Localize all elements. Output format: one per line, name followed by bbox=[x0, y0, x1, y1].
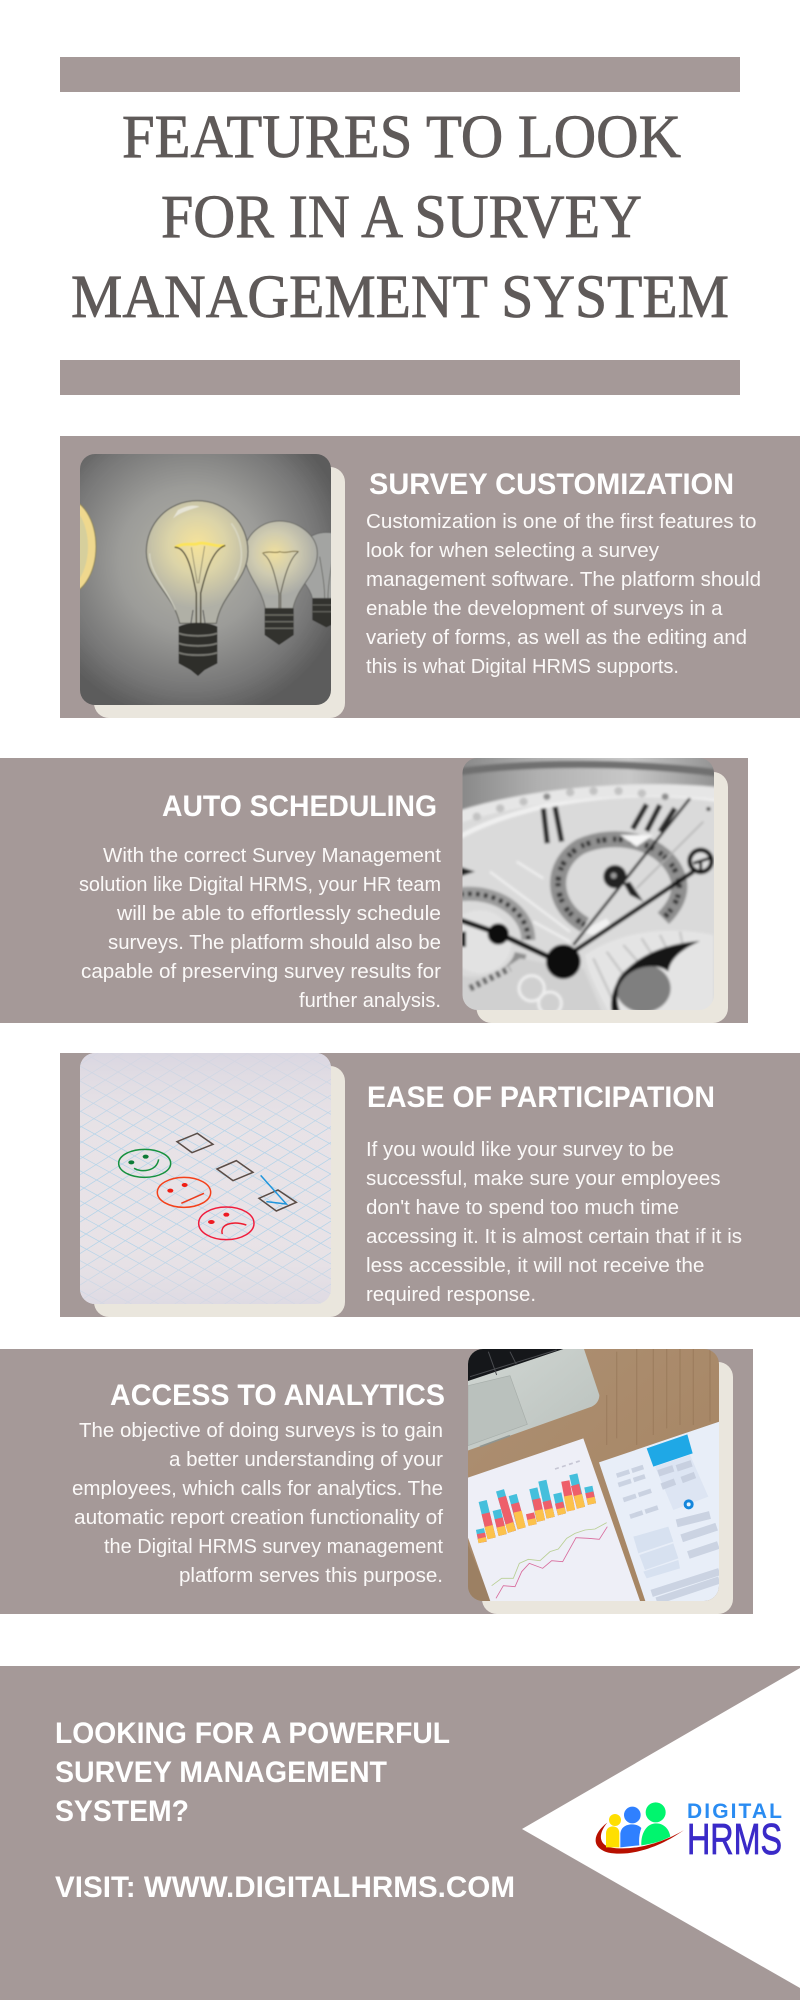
body text: Customization is one of the first features to bbox=[366, 511, 756, 533]
body text: The objective of doing surveys is to gain bbox=[79, 1420, 443, 1442]
body text: variety of forms, as well as the editing and bbox=[366, 627, 747, 649]
body text: the Digital HRMS survey management bbox=[104, 1536, 443, 1558]
title bbox=[71, 104, 729, 331]
logo: Digital HRMS bbox=[596, 1800, 782, 1864]
panel: survey customization bbox=[31, 436, 800, 718]
body text: required response. bbox=[366, 1284, 536, 1306]
heading: SURVEY CUSTOMIZATION bbox=[369, 468, 734, 501]
body text: don't have to spend too much time bbox=[366, 1197, 679, 1219]
call to action text: SYSTEM? bbox=[55, 1795, 189, 1828]
logo wordmark bbox=[687, 1800, 782, 1864]
image: light bulbs bbox=[80, 454, 331, 705]
body text: look for when selecting a survey bbox=[366, 540, 659, 562]
title: MANAGEMENT SYSTEM bbox=[71, 264, 729, 331]
body text: a better understanding of your bbox=[169, 1449, 443, 1471]
body text: accessing it. It is almost certain that if it is bbox=[366, 1226, 742, 1248]
icon: people with swoosh bbox=[596, 1802, 684, 1854]
body text: With the correct Survey Management bbox=[103, 845, 441, 867]
body text: capable of preserving survey results for bbox=[81, 961, 441, 983]
panel: footer call to action bbox=[0, 1666, 800, 2000]
panel: auto scheduling bbox=[0, 755, 748, 1023]
panel background bbox=[0, 1349, 753, 1614]
logo wordmark: DIGITAL bbox=[687, 1800, 782, 1823]
panel: access to analytics bbox=[0, 1345, 753, 1614]
title: FEATURES TO LOOK bbox=[122, 104, 681, 171]
image backing card bbox=[94, 467, 345, 718]
image: smiley checklist bbox=[80, 1053, 331, 1304]
body text: will be able to effortlessly schedule bbox=[116, 903, 441, 925]
body text: automatic report creation functionality of bbox=[74, 1507, 443, 1529]
footer background bbox=[0, 1666, 800, 2000]
report text lines bbox=[617, 1463, 719, 1601]
call to action text: SURVEY MANAGEMENT bbox=[55, 1756, 387, 1789]
image backing card bbox=[482, 1362, 733, 1614]
body text: enable the development of surveys in a bbox=[366, 598, 723, 620]
bar chart bbox=[480, 1474, 592, 1542]
body text bbox=[366, 1139, 742, 1306]
body text: further analysis. bbox=[299, 990, 441, 1012]
image backing card bbox=[94, 1066, 345, 1317]
heading: ACCESS TO ANALYTICS bbox=[110, 1379, 445, 1412]
body text: less accessible, it will not receive the bbox=[366, 1255, 704, 1277]
body text: this is what Digital HRMS supports. bbox=[366, 656, 679, 678]
heading: EASE OF PARTICIPATION bbox=[367, 1081, 715, 1114]
body text: management software. The platform should bbox=[366, 569, 761, 591]
title: FOR IN A SURVEY bbox=[161, 184, 642, 251]
body text: surveys. The platform should also be bbox=[108, 932, 441, 954]
body text: If you would like your survey to be bbox=[366, 1139, 674, 1161]
body text: successful, make sure your employees bbox=[366, 1168, 720, 1190]
panel: ease of participation bbox=[60, 1053, 800, 1317]
body text bbox=[79, 845, 441, 1012]
body text: platform serves this purpose. bbox=[179, 1565, 443, 1587]
heading: AUTO SCHEDULING bbox=[162, 790, 437, 823]
website link text: VISIT: WWW.DIGITALHRMS.COM bbox=[55, 1871, 515, 1904]
bottom title bar bbox=[60, 360, 740, 395]
body text bbox=[366, 511, 761, 678]
image: watch dial bbox=[462, 758, 714, 1010]
call to action text bbox=[55, 1717, 450, 1828]
panel background bbox=[60, 436, 800, 718]
call to action text: LOOKING FOR A POWERFUL bbox=[55, 1717, 450, 1750]
panel background bbox=[0, 758, 748, 1023]
top title bar bbox=[60, 57, 740, 92]
image backing card bbox=[476, 772, 728, 1023]
panel background bbox=[60, 1053, 800, 1317]
image: laptop and reports bbox=[460, 1345, 730, 1605]
body text: solution like Digital HRMS, your HR team bbox=[79, 874, 441, 896]
line chart bbox=[492, 1523, 607, 1598]
body text bbox=[72, 1420, 443, 1587]
body text: employees, which calls for analytics. The bbox=[72, 1478, 443, 1500]
